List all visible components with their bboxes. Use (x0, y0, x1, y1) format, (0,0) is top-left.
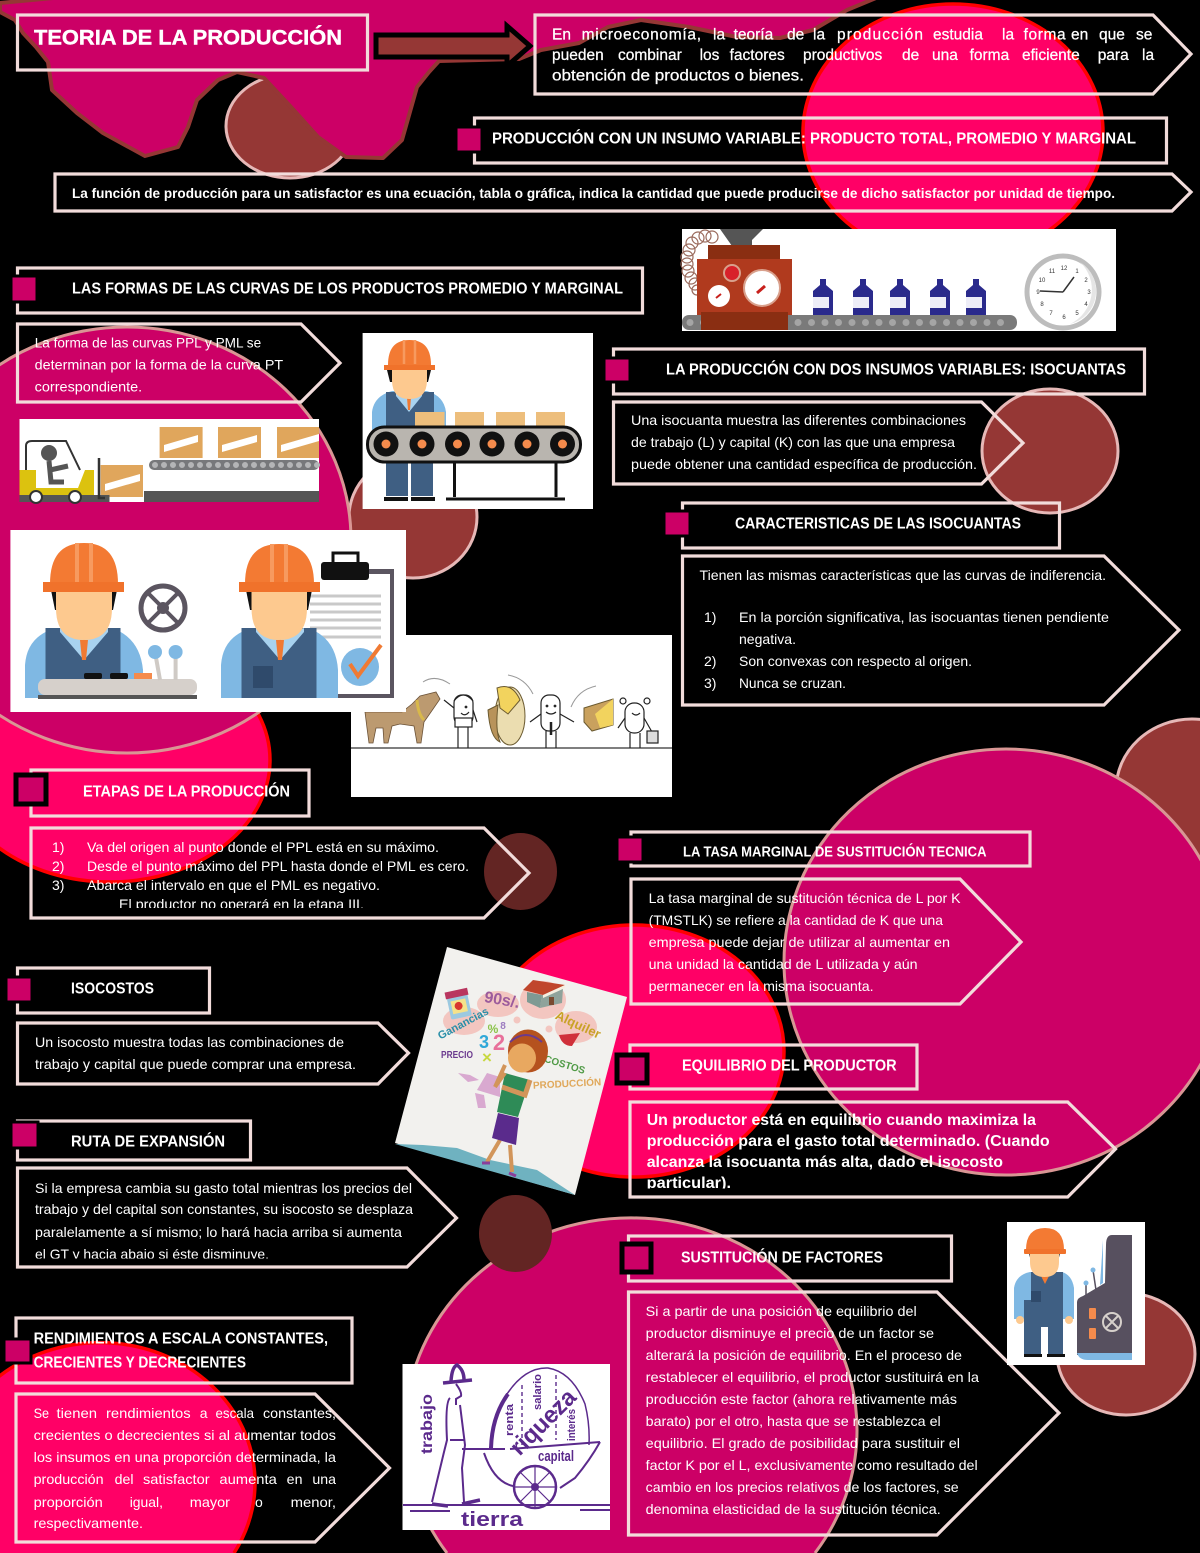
panel: sustitución text: cambio en los precios relativos de los factores, se (646, 1479, 959, 1495)
panel: tasa marginal text: una unidad la cantidad de L utilizada y aún (649, 956, 918, 972)
panel: rendimientos text: aumenta (219, 1471, 277, 1487)
labels: × (482, 1048, 492, 1067)
panel: características text: 2) (704, 653, 716, 669)
circle: dark brown near ruta (479, 1195, 552, 1272)
labels: capital (538, 1448, 574, 1465)
panel: definition: la (1002, 26, 1014, 44)
labels: 2 (493, 1030, 505, 1055)
panel: sustitución text: denomina elasticidad de la sustitución técnica. (646, 1501, 941, 1517)
labels: trabajo (419, 1394, 436, 1454)
panel: ruta de expansión text: el GT y hacia abajo si éste disminuye. (35, 1246, 269, 1262)
ground line (351, 747, 672, 749)
image: forklift and boxes (20, 419, 319, 503)
title (18, 15, 368, 70)
circle: brown bottom right (1057, 1293, 1195, 1415)
panel: rendimientos text: igual, (130, 1494, 163, 1510)
labels: tierra (461, 1509, 524, 1531)
panel: características text: En la porción significativa, las isocuantas tienen pendiente (739, 609, 1109, 625)
panel: equilibrio heading (617, 1045, 917, 1089)
woman (482, 1030, 548, 1176)
panel: formas de las curvas text: correspondiente. (35, 378, 142, 394)
panel: ruta de expansión heading: RUTA DE EXPANSIÓN (71, 1132, 225, 1150)
panel: definition: que (1099, 26, 1125, 44)
panel: rendimientos text: escala (216, 1405, 254, 1421)
image: worker and machine (1007, 1222, 1145, 1365)
circle: dark brown near etapas (484, 833, 557, 910)
panel: isocostos text: trabajo y capital que puede comprar una empresa. (35, 1056, 356, 1072)
panel: rendimientos heading (4, 1318, 352, 1383)
panel: definition: producción (837, 26, 923, 44)
panel: características text: Tienen las mismas características que las curvas de indiferencia. (700, 567, 1106, 583)
ground (144, 491, 319, 502)
strawberry (559, 1033, 580, 1046)
table (446, 463, 565, 499)
conveyor (682, 315, 1017, 330)
conveyor (149, 460, 319, 470)
labels: PRODUCCIÓN (533, 1075, 601, 1092)
panel: definition: forma (1024, 26, 1066, 44)
panel: definition: en (1071, 26, 1088, 44)
panel: sustitución text: factor K por el L, exclusivamente como resultado del (646, 1457, 978, 1473)
panel: dos insumos heading (604, 349, 1144, 394)
panel: rendimientos text: satisfactor (143, 1471, 210, 1487)
panel: etapas text: 3) (52, 877, 64, 893)
panel: tasa marginal heading (617, 832, 1030, 866)
panel: características text (682, 556, 1179, 705)
panel: etapas heading: ETAPAS DE LA PRODUCCIÓN (83, 782, 290, 800)
clock: 3 (1087, 290, 1091, 296)
panel: definition: la (1142, 47, 1154, 64)
panel: rendimientos heading: RENDIMIENTOS A ESCALA CONSTANTES, (34, 1330, 328, 1348)
image: trabajo capital tierra diagram (402, 1364, 610, 1531)
circle: large magenta left (0, 327, 351, 753)
panel: formas de las curvas text: La forma de las curvas PPL y PML se (35, 334, 261, 350)
panel: definition: microeconomía, (582, 26, 701, 44)
labels: PRECIO (441, 1049, 473, 1061)
circle: pink center (484, 925, 784, 1177)
clock: 9 (1036, 290, 1040, 296)
panel: definition: de (787, 26, 804, 44)
panel: función de producción: La función de producción para un satisfactor es una ecuación, tabla o gráfica, indica la cantidad que puede producirse de dicho satisfactor por unidad de tiempo. (72, 185, 1115, 201)
panel: equilibrio text: Un productor está en equilibrio cuando maximiza la (647, 1112, 1036, 1129)
panel: tasa marginal text: empresa puede dejar de utilizar al aumentar en (649, 934, 950, 950)
panel: características text: Son convexas con respecto al origen. (739, 653, 972, 669)
panel: etapas text (31, 828, 529, 918)
panel: definition: estudia (933, 26, 983, 44)
panel: producción con un insumo variable heading: PRODUCCIÓN CON UN INSUMO VARIABLE: PRODUCTO TOTAL, PROMEDIO Y MARGINAL (492, 130, 1136, 148)
panel: dos insumos heading: LA PRODUCCIÓN CON DOS INSUMOS VARIABLES: ISOCUANTAS (666, 360, 1126, 378)
panel: tasa marginal heading: LA TASA MARGINAL DE SUSTITUCIÓN TECNICA (683, 842, 987, 860)
circle: brown right of isocuanta (982, 389, 1118, 513)
panel: definition: pueden (552, 47, 604, 64)
panel: definition: se (1136, 26, 1152, 44)
clock: 8 (1040, 302, 1044, 308)
panel: definition: productivos (803, 47, 883, 64)
panel: sustitución text (628, 1292, 1059, 1535)
panel: isocostos text: Un isocosto muestra todas las combinaciones de (35, 1034, 344, 1050)
panel: isocostos heading (6, 968, 210, 1013)
panel: rendimientos heading: CRECIENTES Y DECRECIENTES (34, 1354, 246, 1372)
panel: ruta de expansión text: paralelamente a sí mismo; lo hará hacia arriba si aumenta (35, 1224, 402, 1240)
panel: características text: 3) (704, 675, 716, 691)
labels: interés (566, 1409, 578, 1441)
panel: características text: 1) (704, 609, 716, 625)
clock: 4 (1084, 302, 1088, 308)
labels (436, 989, 603, 1092)
clock: 1 (1075, 269, 1079, 275)
panel: rendimientos text: los insumos en una proporción determinada, la (34, 1449, 336, 1465)
panel: rendimientos text (16, 1394, 390, 1542)
worker with clipboard (221, 544, 394, 698)
clock: 7 (1049, 311, 1053, 317)
panel: definition (535, 15, 1191, 94)
labels: riqueza (505, 1383, 582, 1461)
panel: características heading: CARACTERISTICAS DE LAS ISOCUANTAS (735, 516, 1021, 532)
panel: características heading (664, 503, 1060, 548)
worker (372, 340, 446, 501)
labels (419, 1374, 582, 1531)
panel: rendimientos text: rendimientos (106, 1405, 191, 1421)
panel: rendimientos text: en (287, 1471, 302, 1487)
person 2 (530, 695, 574, 748)
thought clouds (443, 981, 597, 1043)
boxes on conveyor (415, 412, 565, 427)
panel: equilibrio text: particular). (647, 1175, 731, 1192)
clock: 10 (1039, 278, 1046, 284)
panel: definition: forma (970, 47, 1010, 64)
paper notes (458, 1073, 500, 1108)
panel: isocostos text (18, 1023, 408, 1084)
arrows (423, 675, 596, 707)
labels: Alquiler (553, 1008, 603, 1042)
boxes (160, 427, 319, 458)
panel: isocuanta text: de trabajo (L) y capital (K) con las que una empresa (631, 434, 955, 450)
coil (681, 230, 718, 295)
panel: definition: la (813, 26, 825, 44)
panel: función de producción (55, 174, 1191, 211)
worker (1014, 1228, 1074, 1357)
panel: formas de las curvas text (18, 324, 340, 402)
panel: definition: los (700, 47, 720, 64)
panel: definition: para (1098, 47, 1129, 64)
panel: equilibrio text: producción para el gasto total determinado. (Cuando (647, 1133, 1050, 1150)
labels: Ganancias (436, 1006, 491, 1042)
panel: definition: una (932, 47, 958, 64)
panel: sustitución text: barato) por el otro, hasta que se restablezca el (646, 1413, 941, 1429)
panel: tasa marginal text: permanecer en la misma isocuanta. (649, 978, 874, 994)
labels: renta (504, 1403, 516, 1436)
panel: tasa marginal text: La tasa marginal de sustitución técnica de L por K (649, 890, 961, 906)
panel: definition: En (552, 26, 571, 44)
panel: rendimientos text: menor, (291, 1494, 336, 1510)
circle: large magenta right (784, 749, 1200, 1175)
image: two workers (10, 530, 406, 712)
circle: brown top right corner (1116, 719, 1200, 861)
circle: large magenta bottom center (405, 1218, 857, 1553)
panel: rendimientos text: producción (34, 1471, 104, 1487)
conveyor (368, 427, 580, 462)
labels: 3 (479, 1032, 489, 1052)
panel: etapas heading (16, 770, 309, 816)
panel: producción con un insumo variable heading (456, 118, 1166, 163)
panel: ruta de expansión text: Si la empresa cambia su gasto total mientras los precios del (35, 1180, 412, 1196)
labels: % (488, 1022, 499, 1036)
jar (445, 988, 473, 1020)
panel: etapas text: El productor no operará en la etapa III. (119, 896, 364, 912)
machine (1077, 1235, 1132, 1360)
panel: rendimientos text: tienen (56, 1405, 97, 1421)
panel: sustitución text: restablecer el equilibrio, el productor sustituirá en la (646, 1369, 979, 1385)
clock (1027, 256, 1099, 328)
panel: etapas text: 2) (52, 858, 64, 874)
panel: rendimientos text: del (115, 1471, 134, 1487)
panel: etapas text: Abarca el intervalo en que el PML es negativo. (87, 877, 380, 893)
cheese wheel (488, 686, 525, 745)
clock: 5 (1075, 311, 1079, 317)
clock: 6 (1062, 315, 1066, 321)
clock: 2 (1084, 278, 1088, 284)
teal ground (395, 1144, 575, 1195)
bottles (813, 279, 986, 315)
labels: COSTOS (543, 1054, 587, 1077)
panel: definition: eficiente (1022, 47, 1080, 64)
panel: sustitución text: Si a partir de una posición de equilibrio del (646, 1303, 917, 1319)
person 3 (618, 698, 658, 748)
clock: 11 (1049, 269, 1056, 275)
panel: formas de las curvas heading (11, 268, 642, 313)
panel: sustitución text: alterará la posición de equilibrio. En el proceso de (646, 1347, 962, 1363)
labels: 90s/. (483, 989, 521, 1012)
panel: formas de las curvas heading: LAS FORMAS DE LAS CURVAS DE LOS PRODUCTOS PROMEDIO Y MARGINAL (72, 280, 623, 298)
image: cow to cheese chain (351, 635, 672, 797)
labels: salario (532, 1374, 544, 1410)
worker at controls (25, 543, 197, 699)
image: bottling machine and clock (681, 229, 1116, 331)
panel: equilibrio text: alcanza la isocuanta más alta, dado el isocosto (647, 1154, 1003, 1171)
panel: tasa marginal text (631, 879, 1021, 1004)
panel: definition: factores (730, 47, 785, 64)
arrow: title to definition (376, 26, 530, 66)
panel: etapas text: 1) (52, 839, 64, 855)
panel: isocuanta text (614, 402, 1023, 484)
labels: 8 (500, 1021, 506, 1032)
panel: definition: teoría (734, 26, 774, 44)
circle: pink left middle (0, 638, 270, 882)
circle: brown left middle (349, 456, 477, 578)
panel: rendimientos text: respectivamente. (34, 1515, 143, 1531)
man and wheelbarrow drawing (403, 1365, 610, 1511)
panel: rendimientos text: mayor (190, 1494, 230, 1510)
blob: top magenta shape (0, 0, 876, 158)
panel: equilibrio heading: EQUILIBRIO DEL PRODUCTOR (682, 1058, 897, 1074)
panel: rendimientos text: a (200, 1405, 208, 1421)
panel: etapas text: Va del origen al punto donde el PPL está en su máximo. (87, 839, 439, 855)
circle: top right pink (803, 4, 1103, 260)
panel: sustitución text: producción este factor (ahora relativamente más (646, 1391, 957, 1407)
hopper (720, 229, 763, 246)
panel: etapas text: Desde el punto máximo del PPL hasta donde el PML es cero. (87, 858, 469, 874)
machine (708, 245, 780, 260)
panel: formas de las curvas text: determinan por la forma de la curva PT (35, 356, 284, 372)
forklift (20, 441, 143, 503)
panel: sustitución text: productor disminuye el precio de un factor se (646, 1325, 934, 1341)
clock: 12 (1061, 266, 1068, 272)
panel: isocuanta text: Una isocuanta muestra las diferentes combinaciones (631, 412, 966, 428)
circle: brown under top blob (226, 74, 354, 178)
cheese wedge (584, 699, 613, 731)
panel: sustitución heading (622, 1236, 952, 1281)
panel: rendimientos text: proporción (34, 1494, 103, 1510)
panel: rendimientos text: constantes, (263, 1405, 336, 1421)
circle: pink bottom left (0, 1343, 255, 1553)
panel: sustitución heading: SUSTITUCIÓN DE FACTORES (681, 1248, 883, 1266)
image: worker on conveyor (363, 333, 593, 509)
panel: isocostos heading: ISOCOSTOS (71, 980, 154, 998)
panel: características text: negativa. (739, 631, 796, 647)
image: woman thinking about costs (395, 947, 627, 1195)
panel: ruta de expansión heading (11, 1121, 250, 1160)
panel: sustitución text: equilibrio. El grado de posibilidad para sustituir el (646, 1435, 960, 1451)
panel: definition: combinar (618, 47, 682, 64)
panel: ruta de expansión text: trabajo y del capital son constantes, su isocosto se desplaza (35, 1201, 413, 1217)
panel: isocuanta text: puede obtener una cantidad específica de producción. (631, 456, 977, 472)
panel: características text: Nunca se cruzan. (739, 675, 846, 691)
panel: ruta de expansión text (18, 1168, 456, 1267)
panel: tasa marginal text: (TMSTLK) se refiere a la cantidad de K que una (649, 912, 943, 928)
title: TEORIA DE LA PRODUCCIÓN (34, 26, 342, 50)
panel: definition: obtención de productos o bienes. (552, 68, 804, 84)
panel: rendimientos text: crecientes o decrecientes si al aumentar todos (34, 1427, 336, 1443)
house (523, 980, 565, 1008)
panel: rendimientos text: o (255, 1494, 263, 1510)
panel: definition: la (713, 26, 725, 44)
panel: rendimientos text: Se (34, 1405, 49, 1421)
panel: definition: de (902, 47, 919, 64)
person 1 (444, 695, 477, 748)
panel: rendimientos text: una (312, 1471, 336, 1487)
panel: equilibrio text (630, 1102, 1116, 1197)
cow (365, 692, 440, 743)
